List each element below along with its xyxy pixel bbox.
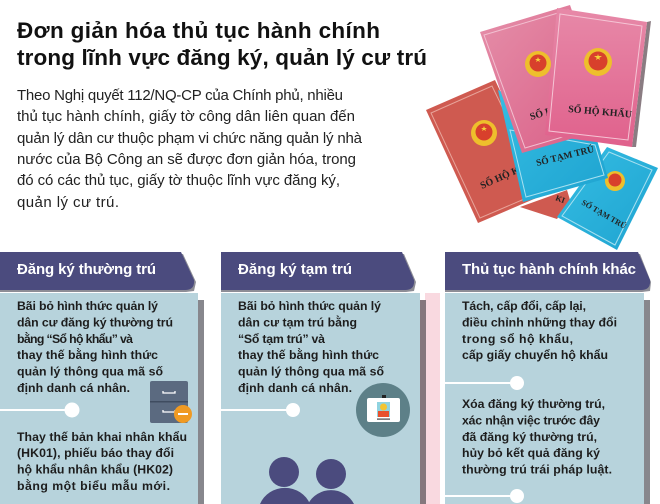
intro paragraph: đó có các thủ tục, giấy tờ thuộc lĩnh vực đăng ký,: [17, 172, 340, 189]
panel 3 shadow: [643, 300, 650, 504]
book: red book fragment: KI: [554, 193, 566, 205]
book: pink household left: SỔ H: [528, 103, 555, 123]
book: red household book: SỔ HỘ KH: [478, 160, 529, 192]
panel 1 text: first item: quản lý thông qua mã số: [17, 364, 163, 378]
panel 2 header: Đăng ký tạm trú: [238, 261, 352, 278]
intro paragraph: thủ tục hành chính, giấy tờ công dân liên quan đến: [17, 108, 355, 125]
panel 2 text: [238, 299, 384, 395]
panel 1 text: first item: Bãi bỏ hình thức quản lý: [17, 299, 158, 313]
panel 3 text: second item: hủy bỏ kết quả đăng ký: [462, 446, 600, 460]
book: blue temporary residence right: SỔ TẠM TRÚ: [580, 197, 628, 231]
intro paragraph: [17, 87, 363, 211]
panel 1 text: first item: định danh cá nhân.: [17, 381, 130, 395]
panel 1 text: second item: Thay thế bản khai nhân khẩu: [17, 430, 187, 444]
panel 1 text: second item: hộ khẩu nhân khẩu (HK02): [17, 462, 173, 476]
panel 2 connector: [221, 403, 300, 417]
panel 3 text: first item: cấp giấy chuyển hộ khẩu: [462, 348, 608, 362]
panel 3 text: second item: thường trú trái pháp luật.: [462, 462, 612, 476]
panel 2 shadow: [419, 300, 426, 504]
book: pink household right: [545, 8, 651, 147]
book: blue temporary residence centre: SỔ TẠM TRÚ: [535, 142, 595, 169]
panel: đăng ký thường trú: [0, 252, 204, 504]
panel 2 text: Bãi bỏ hình thức quản lý: [238, 299, 381, 313]
panel 3 connector one: [445, 376, 524, 390]
panel 2 background: [221, 293, 420, 504]
panel 1 background: [0, 293, 198, 504]
panel 1 text: first item: bằng “Sổ hộ khẩu” và: [17, 331, 133, 346]
panel 3 header: [445, 252, 651, 292]
panel 2 text: “Sổ tạm trú” và: [238, 332, 325, 346]
icon: filing drawers with minus badge: [150, 381, 192, 423]
title: trong lĩnh vực đăng ký, quản lý cư trú: [17, 45, 427, 70]
panel 2 text: thay thế bằng hình thức: [238, 347, 379, 362]
intro paragraph: Theo Nghị quyết 112/NQ-CP của Chính phủ, nhiều: [17, 87, 343, 104]
book: red household book: [426, 80, 548, 223]
panel 3 text: first item: điều chỉnh những thay đổi: [462, 316, 617, 330]
panel 3 text: second item: đã đăng ký thường trú,: [462, 430, 597, 444]
panel 3 text: second item: xác nhận việc trước đây: [462, 414, 600, 428]
panel 3 text: first item: [462, 299, 617, 362]
book: red book fragment: [520, 190, 570, 219]
panel 3 text: second item: Xóa đăng ký thường trú,: [462, 397, 605, 411]
panel 2 text: dân cư tạm trú bằng: [238, 314, 357, 330]
intro paragraph: quản lý dân cư thuộc phạm vi chức năng quản lý nhà: [17, 130, 363, 147]
panel 3 text: first item: Tách, cấp đổi, cấp lại,: [462, 299, 586, 313]
book: pink household right: SỔ HỘ KHẨU: [568, 102, 633, 121]
panel 1 text: first item: dân cư đăng ký thường trú: [17, 316, 173, 330]
panel 3 connector two: [445, 489, 524, 503]
intro paragraph: nước của Bộ Công an sẽ được đơn giản hóa, trong: [17, 151, 356, 168]
icon: id badge: [356, 383, 410, 437]
book: blue temporary residence centre: [498, 90, 608, 202]
panel 1 connector: [0, 402, 80, 418]
panel 2 header: [221, 252, 416, 292]
panel 3 background: [445, 293, 644, 504]
panel 1 text: second item: [17, 430, 187, 493]
panel 1 header: [0, 252, 196, 292]
book: pink household left: [480, 5, 612, 153]
panel 2 text: quản lý thông qua mã số: [238, 364, 384, 378]
panel 1 text: first item: [17, 299, 173, 395]
illustration: household and temporary residence books: [426, 5, 658, 250]
panel: đăng ký tạm trú: [221, 252, 426, 504]
panel 3 text: second item: [462, 397, 612, 476]
panel: thủ tục hành chính khác: [445, 252, 651, 504]
title: Đơn giản hóa thủ tục hành chính: [17, 18, 380, 43]
title: [17, 18, 427, 70]
panel 1 text: second item: bằng một biểu mẫu mới.: [17, 478, 170, 493]
book: blue temporary residence right: [557, 147, 658, 250]
panel 1 text: second item: (HK01), phiếu báo thay đổi: [17, 446, 174, 460]
intro paragraph: quản lý cư trú.: [17, 194, 119, 211]
panel 1 text: first item: thay thế bằng hình thức: [17, 347, 158, 362]
panel 3 header: Thủ tục hành chính khác: [462, 261, 636, 278]
panel 1 shadow: [197, 300, 204, 504]
icon: two people: [260, 457, 354, 504]
pink backdrop strip: [425, 293, 440, 504]
panel 2 text: định danh cá nhân.: [238, 381, 352, 395]
panel 3 text: first item: trong sổ hộ khẩu,: [462, 332, 573, 346]
panel 1 header: Đăng ký thường trú: [17, 261, 156, 278]
